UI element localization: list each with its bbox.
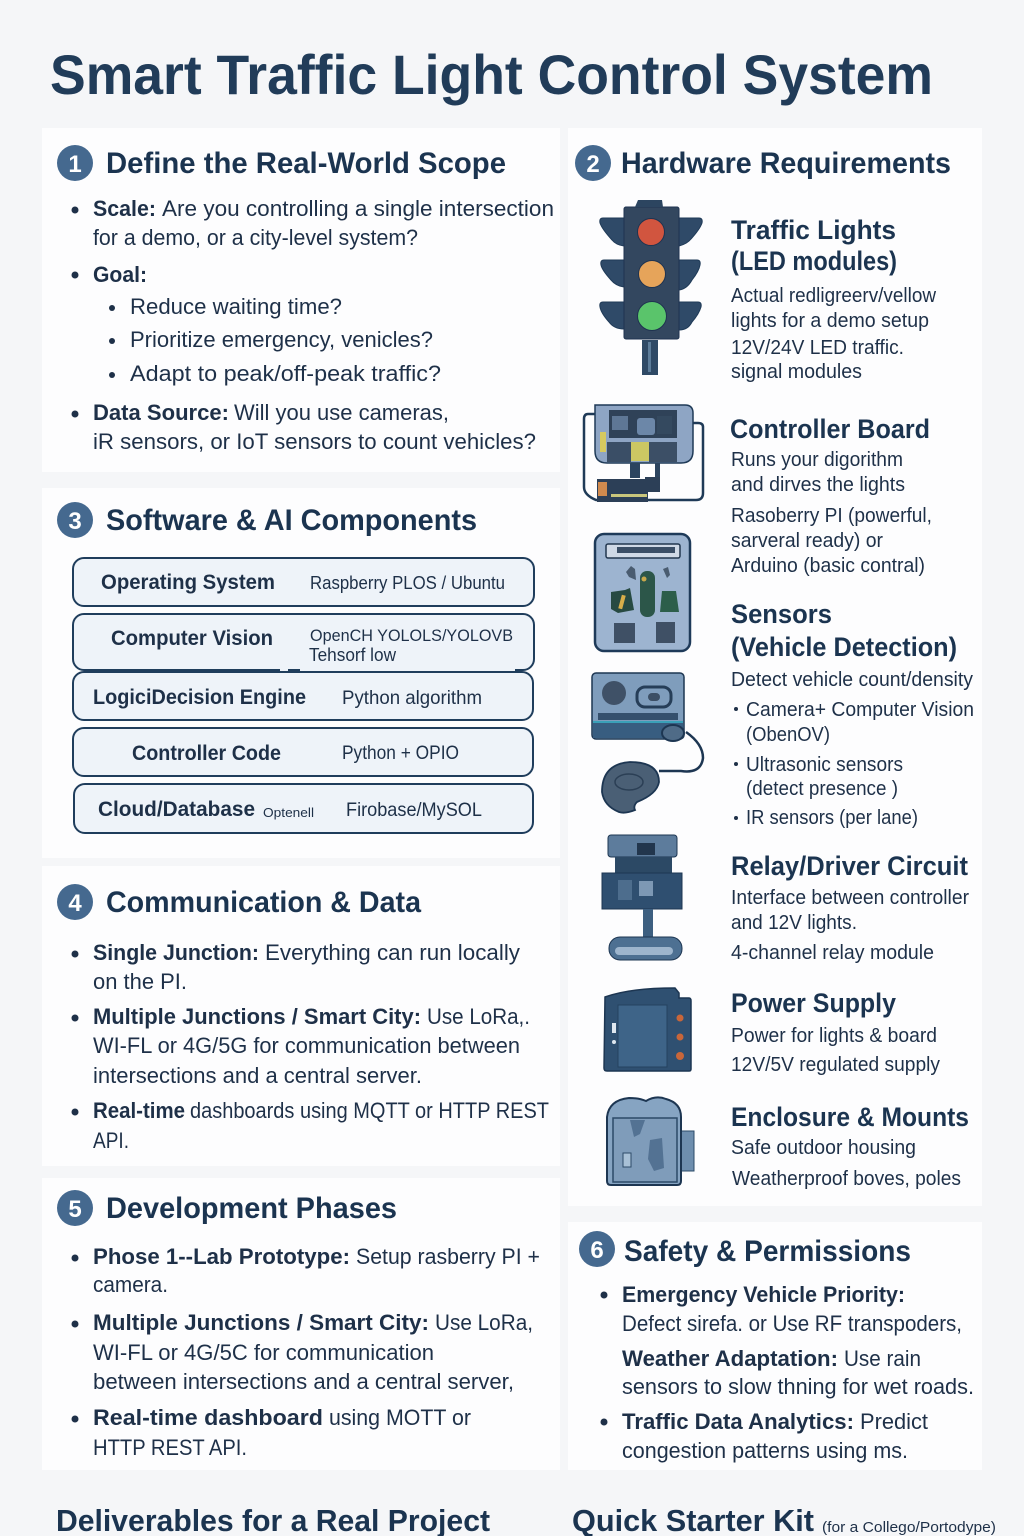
development bullet list: using MOTT or xyxy=(329,1405,471,1430)
section number 1: 1 xyxy=(68,151,82,178)
section number 6: 6 xyxy=(590,1237,604,1264)
icon: enclosure xyxy=(607,1097,694,1185)
text: traffic lights: Actual redligreerv/vellow xyxy=(731,285,937,307)
text: controller board: Runs your digorithm xyxy=(731,449,903,471)
development bullet list: Multiple Junctions / Smart City: xyxy=(93,1310,429,1335)
row: operating system: Raspberry PLOS / Ubuntu xyxy=(310,573,505,593)
row: controller code: Python + OPIO xyxy=(342,742,459,764)
scope bullet list: Scale: xyxy=(93,196,156,221)
communication bullet list: WI-FL or 4G/5G for communication between xyxy=(93,1033,520,1058)
text: relay driver: Interface between controller xyxy=(731,887,969,909)
section number 1 xyxy=(57,145,93,181)
text: sensors: (Vehicle Detection) xyxy=(731,632,957,662)
scope bullet list: Reduce waiting time? xyxy=(130,294,342,319)
heading: hardware: Hardware Requirements xyxy=(621,147,951,180)
panel: communication and data xyxy=(42,866,560,1166)
safety bullet list: Weather Adaptation: xyxy=(622,1346,838,1371)
panel: development phases xyxy=(42,1178,560,1470)
section number 6 xyxy=(579,1231,615,1267)
development bullet list: camera. xyxy=(93,1272,168,1297)
text: sensors: Sensors xyxy=(731,599,832,629)
row: computer vision xyxy=(73,614,534,672)
icon: power supply xyxy=(604,988,691,1071)
row: controller code xyxy=(73,728,533,776)
row: operating system: Operating System xyxy=(101,570,275,594)
heading: quick starter kit xyxy=(572,1503,996,1536)
section number 5 xyxy=(57,1190,93,1226)
scope bullet list: Data Source: xyxy=(93,400,229,425)
row: cloud database: Optenell xyxy=(263,805,314,820)
scope bullet list: iR sensors, or IoT sensors to count vehicles? xyxy=(93,429,536,454)
panel: hardware requirements xyxy=(568,128,982,1206)
text: power supply xyxy=(731,988,940,1076)
icon: camera sensor xyxy=(592,673,703,813)
development bullet list xyxy=(72,1244,540,1460)
communication bullet list: Use LoRa,. xyxy=(427,1004,530,1029)
text: power supply: Power Supply xyxy=(731,988,896,1018)
text: power supply: Power for lights & board xyxy=(731,1025,937,1047)
text: relay driver xyxy=(731,851,969,964)
text: traffic lights: Traffic Lights xyxy=(731,215,896,245)
text: sensors: Camera+ Computer Vision xyxy=(746,699,974,721)
communication bullet list: Multiple Junctions / Smart City: xyxy=(93,1004,421,1029)
text: relay driver: 4-channel relay module xyxy=(731,942,934,964)
communication bullet list: intersections and a central server. xyxy=(93,1063,422,1088)
safety bullet list: congestion patterns using ms. xyxy=(622,1438,908,1463)
heading: communication: Communication & Data xyxy=(106,886,421,919)
text: controller board xyxy=(730,414,932,577)
row: computer vision: Computer Vision xyxy=(111,626,273,650)
icon: traffic light xyxy=(600,200,702,375)
icon: controller board xyxy=(584,405,703,502)
development bullet list: Use LoRa, xyxy=(435,1310,533,1335)
text: sensors: Ultrasonic sensors xyxy=(746,754,903,776)
text: relay driver: Relay/Driver Circuit xyxy=(731,851,968,881)
heading: quick starter kit: (for a Collego/Portodype) xyxy=(822,1519,996,1536)
section number 3 xyxy=(57,502,93,538)
section number 2: 2 xyxy=(586,151,600,178)
section number 4 xyxy=(57,884,93,920)
communication bullet list: dashboards using MQTT or HTTP REST xyxy=(190,1098,549,1123)
panel: software and AI components xyxy=(42,488,560,858)
text: traffic lights xyxy=(731,215,937,383)
row: controller code: Controller Code xyxy=(132,741,281,765)
text: sensors xyxy=(731,599,974,829)
safety bullet list: Predict xyxy=(860,1409,929,1434)
development bullet list: Phose 1--Lab Prototype: xyxy=(93,1244,350,1269)
row: logic decision engine: Python algorithm xyxy=(342,687,482,709)
text: traffic lights: lights for a demo setup xyxy=(731,310,929,332)
text: enclosure xyxy=(731,1102,969,1190)
development bullet list: WI-FL or 4G/5C for communication xyxy=(93,1340,434,1365)
icon: relay driver xyxy=(602,835,682,960)
row: operating system xyxy=(73,558,534,606)
section number 2 xyxy=(575,145,611,181)
text: controller board: Arduino (basic contral) xyxy=(731,555,925,577)
scope bullet list: Goal: xyxy=(93,262,147,287)
text: power supply: 12V/5V regulated supply xyxy=(731,1054,940,1076)
row: cloud database: Cloud/Database xyxy=(98,797,255,821)
scope bullet list xyxy=(72,196,554,454)
scope bullet list: Adapt to peak/off-peak traffic? xyxy=(130,361,441,386)
heading: scope: Define the Real-World Scope xyxy=(106,147,506,180)
section number 3: 3 xyxy=(68,508,82,535)
development bullet list: Setup rasberry PI + xyxy=(356,1244,540,1269)
development bullet list: HTTP REST API. xyxy=(93,1435,247,1460)
section number 5: 5 xyxy=(68,1196,82,1223)
communication bullet list: on the PI. xyxy=(93,969,187,994)
text: enclosure: Safe outdoor housing xyxy=(731,1137,916,1159)
row: computer vision: Tehsorf low xyxy=(309,645,397,665)
communication bullet list: API. xyxy=(93,1128,129,1153)
development bullet list: Real-time dashboard xyxy=(93,1405,323,1430)
text: sensors: IR sensors (per lane) xyxy=(746,807,918,829)
scope bullet list: Prioritize emergency, venicles? xyxy=(130,327,433,352)
communication bullet list xyxy=(72,940,549,1153)
text: controller board: Rasoberry PI (powerful, xyxy=(731,505,932,527)
row: cloud database xyxy=(74,784,533,833)
communication bullet list: Single Junction: xyxy=(93,940,259,965)
row: logic decision engine xyxy=(73,672,533,720)
section number 4: 4 xyxy=(68,890,82,917)
scope bullet list: Are you controlling a single intersection xyxy=(162,196,554,221)
text: controller board: and dirves the lights xyxy=(731,474,905,496)
safety bullet list xyxy=(600,1282,974,1463)
heading: software: Software & AI Components xyxy=(106,504,477,537)
communication bullet list: Everything can run locally xyxy=(265,940,521,965)
text: traffic lights: 12V/24V LED traffic. xyxy=(731,337,904,359)
communication bullet list: Real-time xyxy=(93,1098,185,1123)
text: sensors: Detect vehicle count/density xyxy=(731,669,973,691)
development bullet list: between intersections and a central server, xyxy=(93,1369,514,1394)
safety bullet list: Traffic Data Analytics: xyxy=(622,1409,854,1434)
safety bullet list: Use rain xyxy=(844,1346,921,1371)
text: traffic lights: signal modules xyxy=(731,361,862,383)
row: cloud database: Firobase/MySOL xyxy=(346,799,482,821)
scope bullet list: for a demo, or a city-level system? xyxy=(93,225,418,250)
heading: safety: Safety & Permissions xyxy=(624,1235,911,1268)
row: logic decision engine: LogiciDecision Engine xyxy=(93,685,306,709)
text: sensors: (ObenOV) xyxy=(746,724,830,746)
text: sensors: (detect presence ) xyxy=(746,778,898,800)
safety bullet list: Defect sirefa. or Use RF transpoders, xyxy=(622,1311,962,1336)
panel: safety and permissions xyxy=(568,1222,982,1470)
heading: development: Development Phases xyxy=(106,1192,397,1225)
text: controller board: Controller Board xyxy=(730,414,930,444)
text: enclosure: Enclosure & Mounts xyxy=(731,1102,969,1132)
text: controller board: sarveral ready) or xyxy=(731,530,883,552)
text: relay driver: and 12V lights. xyxy=(731,912,857,934)
row: computer vision: OpenCH YOLOLS/YOLOVB xyxy=(310,626,513,645)
title: Smart Traffic Light Control System xyxy=(50,43,933,106)
safety bullet list: sensors to slow thning for wet roads. xyxy=(622,1374,974,1399)
safety bullet list: Emergency Vehicle Priority: xyxy=(622,1282,905,1307)
icon: sensors panel xyxy=(595,534,690,651)
panel: define the real-world scope xyxy=(42,128,560,472)
text: traffic lights: (LED modules) xyxy=(731,246,897,276)
scope bullet list: Will you use cameras, xyxy=(234,400,449,425)
text: enclosure: Weatherproof boves, poles xyxy=(732,1168,961,1190)
